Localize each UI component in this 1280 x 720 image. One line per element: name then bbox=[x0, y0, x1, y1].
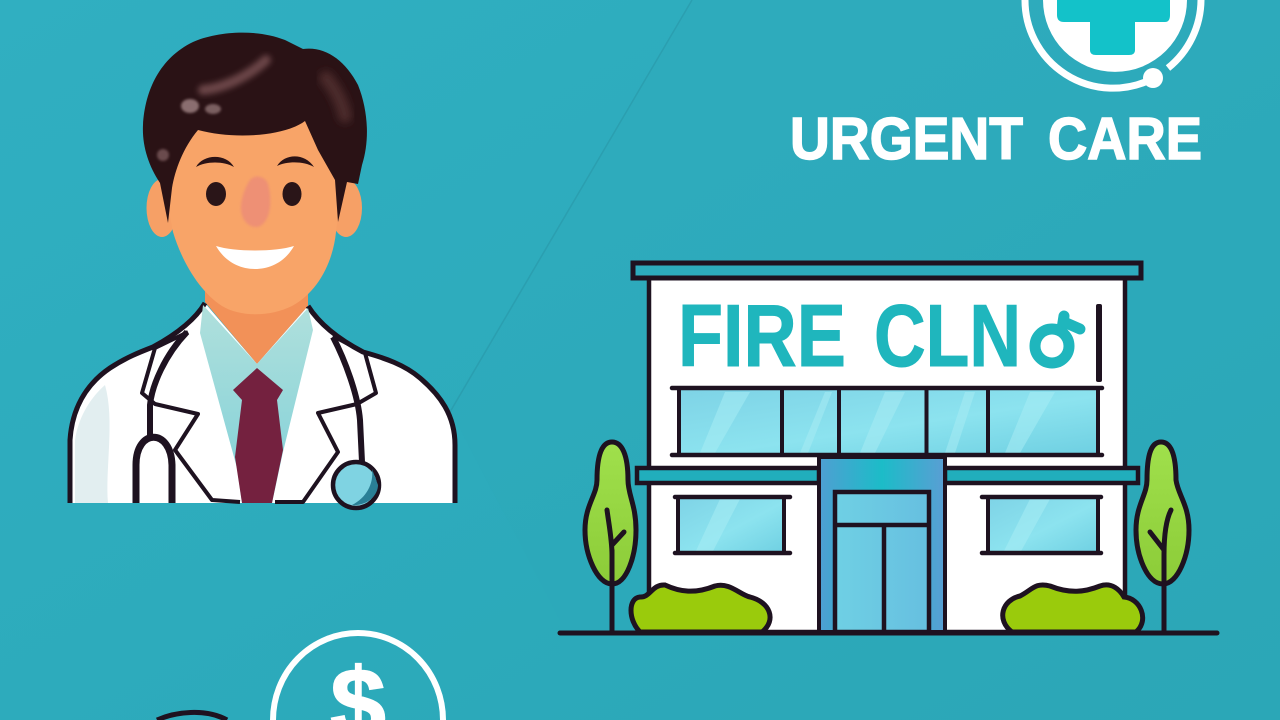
heading: urgent care: CARE bbox=[1048, 106, 1202, 172]
doctor shirt collar bbox=[200, 305, 313, 503]
doctor nose bbox=[241, 177, 270, 227]
logo ring right arc bbox=[1168, 0, 1201, 68]
doctor neck bbox=[205, 285, 308, 364]
coat outline bbox=[70, 303, 455, 503]
right tree bbox=[1136, 442, 1189, 632]
coat lapels bbox=[142, 332, 376, 502]
left tree bbox=[585, 442, 636, 632]
upper window band bbox=[672, 388, 1102, 455]
doctor white coat bbox=[70, 303, 455, 503]
dollar coin icon bbox=[273, 633, 443, 720]
ground line bbox=[560, 630, 1217, 636]
doctor eyes bbox=[206, 182, 302, 206]
heading: urgent care bbox=[790, 106, 1202, 172]
clinic sign text bbox=[678, 286, 1021, 385]
building roof bbox=[633, 263, 1141, 278]
logo inner disc bbox=[1043, 0, 1187, 72]
lower left window bbox=[675, 497, 790, 553]
logo stethoscope knob bbox=[1143, 68, 1163, 88]
heading: urgent care: URGENT bbox=[790, 106, 1023, 172]
building wall bbox=[649, 278, 1125, 632]
clinic building illustration bbox=[560, 263, 1217, 633]
doctor eyebrows bbox=[196, 156, 314, 167]
clinic sign text: CLN bbox=[874, 286, 1021, 385]
doctor hair bbox=[143, 33, 367, 223]
entrance bbox=[819, 457, 945, 632]
coat shading bbox=[75, 385, 110, 503]
urgent care logo bbox=[1025, 0, 1201, 88]
stethoscope bbox=[136, 332, 379, 508]
sign black bar bbox=[1096, 304, 1102, 382]
mid canopy band bbox=[637, 468, 1138, 483]
sign symbol bbox=[1035, 316, 1080, 363]
logo medical cross bbox=[1057, 0, 1170, 55]
left bush bbox=[631, 585, 770, 632]
doctor illustration bbox=[70, 33, 455, 508]
doctor ears bbox=[146, 179, 362, 237]
doctor tie bbox=[233, 368, 283, 503]
doctor smile bbox=[216, 246, 294, 269]
right bush bbox=[1003, 585, 1143, 632]
doctor face bbox=[164, 115, 342, 314]
lower right window bbox=[982, 497, 1101, 553]
logo outer ring bbox=[1025, 0, 1150, 88]
clinic sign text: FIRE bbox=[678, 286, 846, 385]
partial dark outline at bottom edge bbox=[157, 712, 227, 720]
